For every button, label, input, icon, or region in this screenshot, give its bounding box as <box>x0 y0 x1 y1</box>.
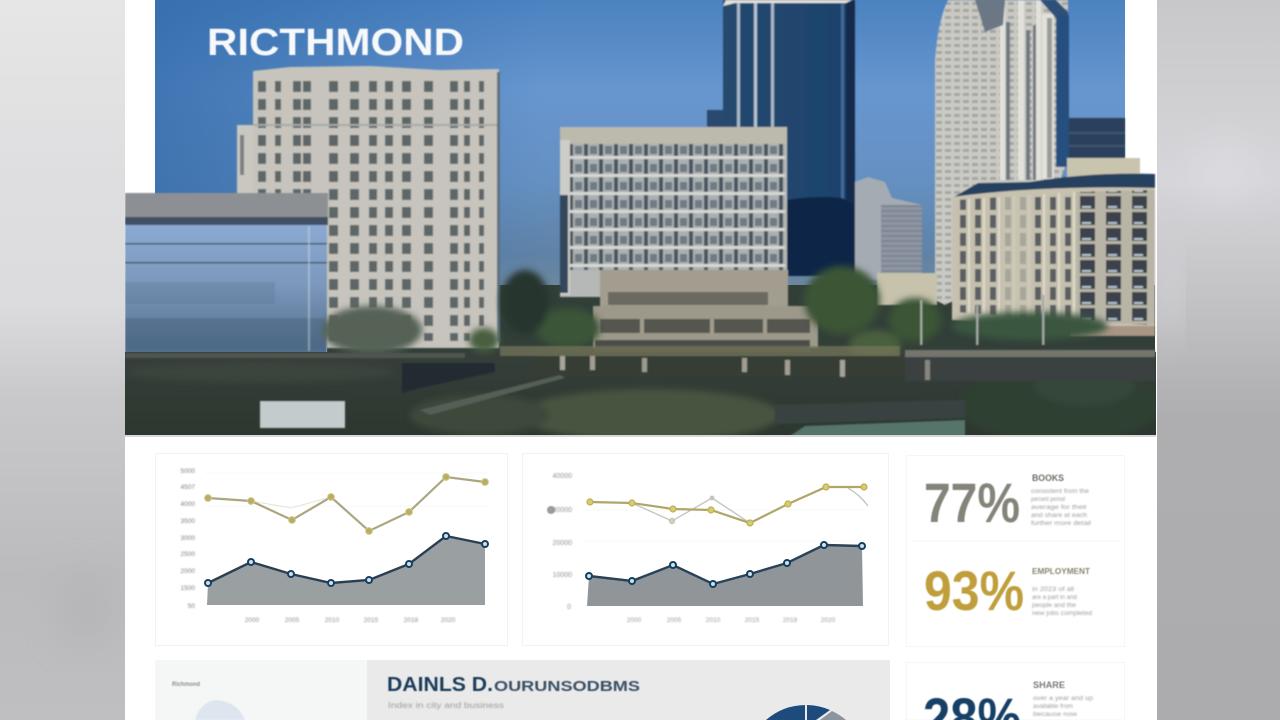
stat: 77%: and share at each <box>1031 512 1087 519</box>
building: white hotel <box>237 66 500 348</box>
y axis labels left chart: 5000 <box>181 468 195 475</box>
faint gold series left chart <box>251 497 331 508</box>
x axis labels right chart: 2000 <box>627 617 642 624</box>
x axis labels left chart: 2018 <box>404 617 419 624</box>
stat: 93%: are a part in and <box>1032 594 1077 601</box>
y axis labels right chart: 30000 <box>553 507 572 514</box>
stat: 93% <box>924 559 1092 622</box>
navy line left chart <box>205 533 488 586</box>
stat: 93%: new jobs completed <box>1032 610 1092 617</box>
x axis labels right chart: 2010 <box>706 617 721 624</box>
building: striped centre block <box>560 127 787 297</box>
area series left chart <box>207 536 485 605</box>
subheading: Index in city and business <box>388 701 504 710</box>
x axis labels right chart: 2018 <box>783 617 798 624</box>
building: beige curved block <box>952 158 1155 336</box>
y axis labels right chart: 20000 <box>553 540 572 547</box>
stat: 77%: consistent from the <box>1031 488 1089 495</box>
dark glass tower <box>707 0 855 276</box>
gold line left chart <box>205 474 488 534</box>
x axis labels left chart: 2020 <box>441 617 456 624</box>
y axis labels left chart: 1500 <box>181 585 195 592</box>
stat: 93%: people and the <box>1032 602 1076 609</box>
x axis labels right chart: 2005 <box>667 617 682 624</box>
y axis labels left chart: 4507 <box>181 484 195 491</box>
stat: 93%: in 2023 of all <box>1032 586 1075 593</box>
x axis labels left chart: 2010 <box>325 617 340 624</box>
x axis labels right chart: 2015 <box>745 617 760 624</box>
stat: 77% <box>924 471 1092 534</box>
stat: 93%: 93% <box>924 559 1024 622</box>
stat: 77%: average for their <box>1031 504 1088 511</box>
stat: 28%: because now <box>1033 711 1077 718</box>
gray comparison lines right chart <box>632 488 868 524</box>
gridlines left chart <box>205 473 488 506</box>
x axis labels left chart: 2000 <box>245 617 260 624</box>
dark background block <box>1068 117 1126 159</box>
y axis labels right chart: 10000 <box>553 572 572 579</box>
y axis labels left chart <box>181 468 195 610</box>
y axis labels left chart: 50 <box>188 603 195 610</box>
y axis labels left chart: 3500 <box>181 518 195 525</box>
y axis labels left chart: 4000 <box>181 501 195 508</box>
tree backdrop <box>327 285 1155 352</box>
panel: bottom left <box>155 660 367 720</box>
y axis labels left chart: 2500 <box>181 551 195 558</box>
panel: bottom demographics <box>367 660 890 720</box>
y axis labels right chart: 0 <box>567 604 571 611</box>
far gray building <box>855 177 922 280</box>
chart: donut <box>766 705 846 720</box>
icon: pale map shape <box>195 700 245 720</box>
ground and trees <box>125 266 1160 443</box>
stat: 28%: over a year and up <box>1033 695 1093 702</box>
backdrop: right gray panel <box>1156 0 1280 720</box>
stat: 28% <box>906 662 1124 720</box>
y axis labels right chart: 40000 <box>553 473 572 480</box>
gold line right chart <box>587 484 867 526</box>
building: glass atrium <box>125 193 328 354</box>
heading <box>387 674 640 696</box>
tall white tower <box>935 0 1069 305</box>
stat: 77%: 77% <box>924 471 1020 534</box>
panel: line chart right <box>522 454 888 646</box>
panel: stats column <box>906 456 1124 646</box>
stat: 28%: available from <box>1033 703 1073 710</box>
x axis labels right chart <box>627 617 836 624</box>
building: low concrete podium <box>593 270 818 358</box>
navy line right chart <box>586 542 865 587</box>
area series right chart <box>587 545 863 606</box>
stat: 77%: BOOKS <box>1032 473 1064 483</box>
panel: line chart left <box>156 454 508 646</box>
stat: 93%: EMPLOYMENT <box>1032 566 1091 576</box>
hero photo: city skyline <box>125 0 1160 443</box>
gridlines right chart <box>585 510 865 541</box>
building: cream low block <box>877 273 937 305</box>
y axis labels left chart: 3000 <box>181 535 195 542</box>
x axis labels left chart: 2015 <box>364 617 379 624</box>
small caption: Richmond <box>172 682 200 688</box>
backdrop: left gray panel <box>0 0 126 720</box>
x axis labels left chart: 2005 <box>285 617 300 624</box>
sky <box>155 0 1125 300</box>
small icon on axis <box>547 506 555 514</box>
y axis labels left chart: 2000 <box>181 568 195 575</box>
stat: 28%: SHARE <box>1033 680 1065 690</box>
stat: 77%: percent period <box>1031 496 1065 503</box>
heading: DAINLS D. <box>387 674 493 696</box>
x axis labels left chart <box>245 617 456 624</box>
x axis labels right chart: 2020 <box>821 617 836 624</box>
heading: OURUNSODBMS <box>494 678 640 695</box>
stat: 77%: further more detail <box>1031 520 1092 527</box>
title: RICTHMOND <box>207 22 464 64</box>
y axis labels right chart <box>553 473 572 611</box>
